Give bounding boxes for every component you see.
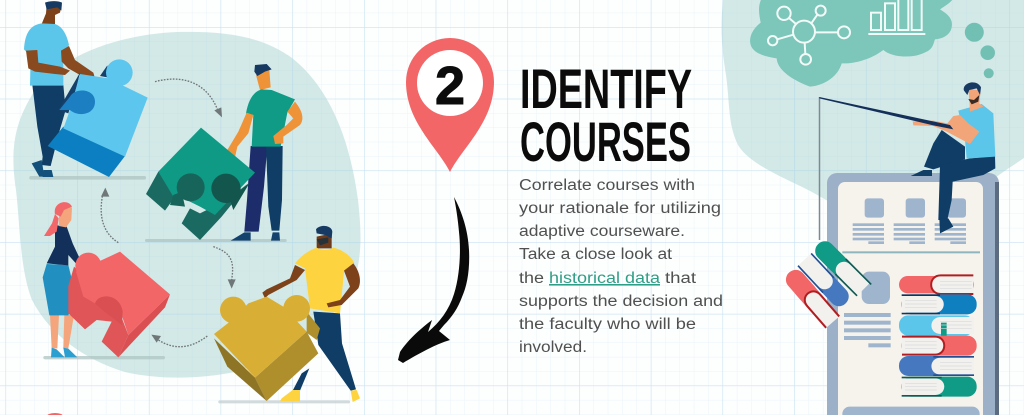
red puzzle piece (68, 252, 170, 357)
leaning books (782, 237, 872, 328)
book: light blue with bookmark (899, 315, 974, 337)
brush arrow (398, 197, 469, 363)
shirt (958, 104, 995, 159)
back shoe (939, 218, 953, 233)
title: identify courses (520, 57, 692, 173)
puzzle cycle illustration (24, 1, 360, 403)
yellow puzzle piece (214, 295, 320, 401)
title: identify courses: COURSES (520, 110, 691, 173)
beard (968, 95, 979, 104)
front leg (924, 130, 965, 169)
body text: the faculty who will be (519, 316, 696, 333)
fishing rod (819, 97, 953, 129)
dotted arrow: red to blue (101, 188, 118, 243)
next pin peeking at bottom edge (47, 413, 63, 415)
body text: that (665, 270, 697, 287)
dotted arrow: blue to green (155, 79, 222, 117)
green puzzle piece (146, 128, 255, 240)
fishing line (818, 97, 820, 240)
neck and face (968, 88, 983, 112)
title: identify courses: IDENTIFY (520, 57, 692, 120)
seated leg (938, 156, 995, 220)
icon: bar chart (868, 0, 925, 34)
icon: network (768, 6, 850, 65)
book: leaning red (782, 266, 840, 328)
map pin with number 2: 2 (435, 56, 465, 116)
map pin with number 2 (406, 38, 494, 172)
hair (964, 82, 981, 95)
body text: adaptive courseware. (519, 223, 685, 240)
ground shadows (29, 176, 350, 403)
body text: your rationale for utilizing (519, 200, 721, 217)
front shoe (911, 170, 932, 176)
dotted arrow: yellow to red (151, 335, 207, 347)
teal blob behind puzzle figures (13, 32, 360, 378)
body text: Take a close look at (519, 246, 673, 263)
body text: historical data (549, 270, 660, 287)
book: coral (902, 336, 977, 356)
thought cloud with data icons (750, 0, 953, 87)
body text (519, 177, 723, 356)
teal blob behind fisherman (722, 0, 1024, 205)
tablet content blocks (842, 198, 980, 415)
body text: supports the decision and (519, 293, 723, 310)
figure: man in green shirt (227, 64, 302, 241)
dotted arrow: green to yellow (213, 247, 236, 289)
figure: man in blue shirt (24, 1, 95, 177)
body text: involved. (519, 339, 587, 356)
figure: man in yellow shirt (262, 226, 360, 402)
book: blue (902, 294, 977, 314)
stack of books (899, 275, 977, 397)
book: indigo (899, 356, 974, 376)
figure: fisherman (819, 82, 995, 233)
book: leaning blue (798, 253, 853, 310)
body text: Correlate courses with (519, 177, 695, 194)
book: red (899, 275, 974, 294)
blue puzzle piece (48, 59, 148, 177)
figure: woman with red hair (43, 202, 93, 357)
arm (913, 115, 979, 144)
book: leaning green (811, 237, 872, 298)
book: green (902, 377, 977, 397)
thought bubbles (965, 23, 995, 78)
body text: the (519, 270, 544, 287)
tablet device (827, 173, 999, 415)
